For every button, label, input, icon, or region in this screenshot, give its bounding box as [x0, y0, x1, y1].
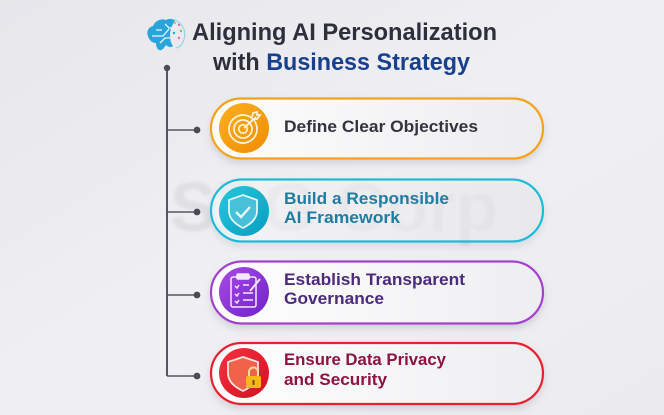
panel: Establish Transparent Governance: Governance	[284, 289, 384, 308]
timeline connector	[164, 65, 200, 379]
icon: AI brain	[147, 19, 185, 50]
watermark: SPG Corp	[170, 168, 498, 246]
panel: Ensure Data Privacy and Security: and Security	[284, 370, 388, 389]
panel: Ensure Data Privacy and Security: Ensure Data Privacy	[284, 350, 447, 369]
title: Aligning AI Personalization	[192, 19, 497, 46]
panel: Establish Transparent Governance: Establish Transparent	[284, 270, 465, 289]
icon: target	[229, 112, 260, 143]
icon: shield with padlock	[228, 357, 261, 391]
panel: Build a Responsible AI Framework: Build a Responsible	[284, 189, 449, 208]
panel: Build a Responsible AI Framework: AI Framework	[284, 208, 401, 227]
title	[192, 19, 497, 76]
icon: clipboard checklist	[231, 274, 260, 307]
panel: Build a Responsible AI Framework	[211, 180, 543, 242]
panel: Define Clear Objectives: Define Clear Objectives	[284, 117, 478, 136]
title: with Business Strategy	[212, 49, 471, 76]
panel: Define Clear Objectives	[211, 98, 543, 158]
panel: Establish Transparent Governance	[211, 262, 543, 324]
icon: shield check	[229, 195, 257, 228]
panel: Ensure Data Privacy and Security	[211, 343, 543, 404]
